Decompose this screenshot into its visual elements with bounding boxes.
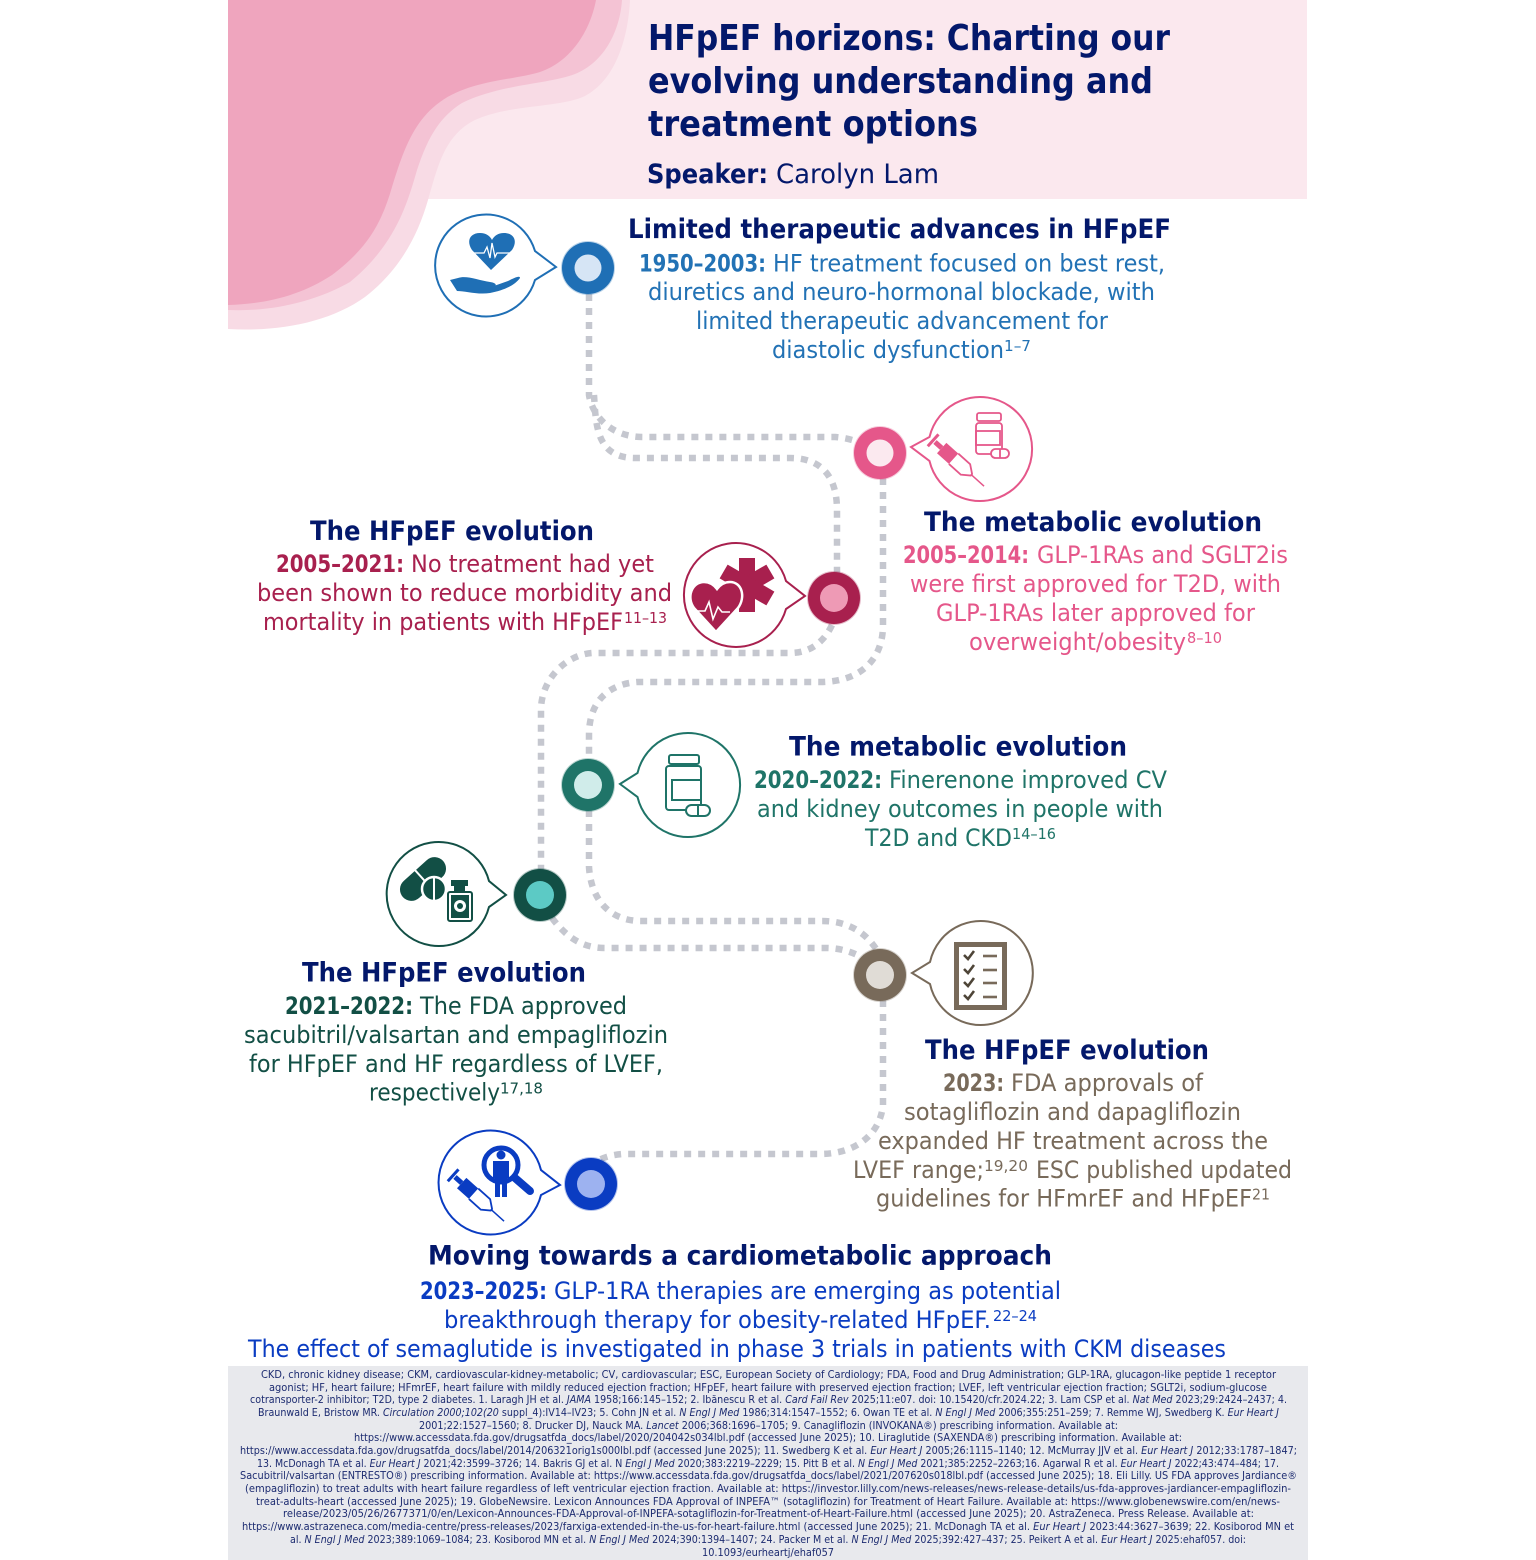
body text: 2020–2022: <box>754 766 882 794</box>
heading: Moving towards a cardiometabolic approach <box>428 1240 1052 1272</box>
body text: respectively <box>369 1078 500 1106</box>
speaker <box>647 159 939 190</box>
icon: heart in hand speech bubble <box>435 215 556 317</box>
node 4 <box>561 758 615 812</box>
body text: 2005–2014: <box>903 541 1029 569</box>
block: metabolic evolution 2005-2014 <box>903 507 1288 656</box>
body text <box>639 250 1165 364</box>
node 3 <box>807 571 861 625</box>
heading: The HFpEF evolution <box>925 1035 1209 1066</box>
icon: checklist speech bubble <box>912 921 1033 1025</box>
body text: for HFpEF and HF regardless of LVEF, <box>249 1050 663 1078</box>
footer: abbreviations and references: Sacubitril/valsartan (ENTRESTO®) prescribing information. Available at: https://www.accessdata.fda.gov/drugsatfda_docs/label/2021/207620s018lbl.pdf (accessed June 2025); 18. Eli Lilly. US FDA approves Jardiance® <box>240 1470 1297 1482</box>
node 7 <box>564 1157 618 1211</box>
speaker: Carolyn Lam <box>776 159 939 190</box>
block: moving towards a cardiometabolic approach <box>247 1240 1226 1363</box>
title: HFpEF horizons: Charting our <box>648 18 1170 59</box>
block: metabolic evolution 2020-2022 <box>754 732 1168 852</box>
body text: GLP-1RAs and SGLT2is <box>1037 541 1288 569</box>
body text: 2005–2021: <box>276 550 404 578</box>
body text: FDA approvals of <box>1011 1069 1204 1097</box>
footer: abbreviations and references: treat-adults-heart (accessed June 2025); 19. GlobeNewsire. Lexicon Announces FDA Approval of INPEFA™ (sotagliflozin) for Treatment of Heart Failure. Available at: https://www.globenewswire.com/en/news- <box>256 1496 1280 1508</box>
footer: abbreviations and references <box>228 1366 1308 1560</box>
footer: abbreviations and references: 2001;22:1527–1560; 8. Drucker DJ, Nauck MA. Lancet 2006;368:1696–1705; 9. Canagliflozin (INVOKANA®) prescribing information. Available at: <box>419 1420 1118 1432</box>
body text: The effect of semaglutide is investigated in phase 3 trials in patients with CKM diseases <box>247 1335 1226 1363</box>
footer: abbreviations and references: cotransporter-2 inhibitor; T2D, type 2 diabetes. 1. Laragh JH et al. JAMA 1958;166:145–152; 2. Ibănescu R et al. Card Fail Rev 2025;11:e07. doi: 10.15420/cfr.2024.22; 3. Lam CSP et al. Nat Med 2023;29:2424–2437; 4. <box>250 1394 1287 1406</box>
body text: GLP-1RA therapies are emerging as potential <box>554 1277 1061 1305</box>
body text: 22–24 <box>993 1307 1037 1325</box>
footer: abbreviations and references: 10.1093/eurheartj/ehaf057 <box>702 1547 834 1559</box>
body text: diuretics and neuro-hormonal blockade, with <box>648 278 1155 306</box>
body text: The FDA approved <box>419 992 627 1020</box>
body text: 8–10 <box>1187 629 1222 647</box>
body text: Finerenone improved CV <box>889 766 1168 794</box>
decorative wave: light <box>228 0 630 330</box>
body text: GLP-1RAs later approved for <box>936 599 1255 627</box>
footer: abbreviations and references: CKD, chronic kidney disease; CKM, cardiovascular-kidney-metabolic; CV, cardiovascular; ESC, European Society of Cardiology; FDA, Food and Drug Administration; GLP-1RA, glucagon-like peptide 1 receptor <box>261 1369 1277 1381</box>
icon: pills and bottle speech bubble <box>387 842 506 946</box>
speaker: Speaker: <box>647 159 768 190</box>
heading: The HFpEF evolution <box>310 516 594 547</box>
body text: 2021–2022: <box>285 992 413 1020</box>
body text: 19,20 <box>984 1157 1028 1175</box>
body text <box>853 1069 1292 1212</box>
body text: 1–7 <box>1004 337 1031 355</box>
body text: 17,18 <box>500 1080 543 1098</box>
body text: 2023: <box>943 1069 1004 1097</box>
body text <box>247 1277 1226 1363</box>
heading: The metabolic evolution <box>789 732 1127 762</box>
body text: 2023–2025: <box>420 1277 547 1305</box>
footer: abbreviations and references: https://www.accessdata.fda.gov/drugsatfda_docs/label/2020/204042s034lbl.pdf (accessed June 2025); 10. Liraglutide (SAXENDA®) prescribing information. Available at: <box>354 1432 1182 1444</box>
body text: were first approved for T2D, with <box>910 570 1281 598</box>
heading: Limited therapeutic advances in HFpEF <box>628 214 1171 245</box>
body text: diastolic dysfunction <box>772 336 1004 364</box>
node 2 <box>853 426 907 480</box>
node 5 <box>513 868 567 922</box>
title <box>648 18 1170 145</box>
icon: teal bottle speech bubble <box>620 733 740 837</box>
header band <box>228 0 1307 199</box>
decorative wave: dark <box>228 0 596 305</box>
block: HFpEF evolution 2023 <box>853 1035 1292 1212</box>
block: limited therapeutic advances <box>628 214 1171 364</box>
body text: 11–13 <box>624 609 667 627</box>
body text: sotagliflozin and dapagliflozin <box>904 1098 1241 1126</box>
body text: No treatment had yet <box>411 550 654 578</box>
body text: HF treatment focused on best rest, <box>773 250 1165 278</box>
body text: 1950–2003: <box>639 250 766 278</box>
footer: abbreviations and references: release/2023/05/26/2677371/0/en/Lexicon-Announces-FDA-Approval-of-INPEFA-sotagliflozin-for-Treatment-of-Heart-Failure.html (accessed June 2025); 20. AstraZeneca. Press Release. Available at: <box>283 1508 1254 1520</box>
body text <box>903 541 1288 656</box>
title: treatment options <box>648 104 978 145</box>
footer: abbreviations and references: https://www.accessdata.fda.gov/drugsatfda_docs/label/2014/206321orig1s000lbl.pdf (accessed June 2025); 11. Swedberg K et al. Eur Heart J 2005;26:1115–1140; 12. McMurray JJV et al. Eur Heart J 2012;33:1787–1847; <box>240 1445 1297 1457</box>
body text: 21 <box>1252 1186 1270 1204</box>
body text: 14–16 <box>1012 825 1056 843</box>
block: HFpEF evolution 2005-2021 <box>257 516 672 636</box>
body text <box>257 550 672 636</box>
timeline dotted paths <box>541 294 883 1165</box>
body text <box>754 766 1168 852</box>
footer: abbreviations and references: agonist; HF, heart failure; HFmrEF, heart failure with mildly reduced ejection fraction; HFpEF, heart failure with preserved ejection fraction; LVEF, left ventricular ejection fraction; SGLT2i, sodium-glucose <box>269 1382 1267 1394</box>
body text: been shown to reduce morbidity and <box>257 579 672 607</box>
footer: abbreviations and references: (empagliflozin) to treat adults with heart failure regardless of left ventricular ejection fraction. Available at: https://investor.lilly.com/news-releases/news-release-details/us-fda-approves-jardiancer-empagliflozin- <box>245 1483 1291 1495</box>
body text: and kidney outcomes in people with <box>757 795 1163 823</box>
body text <box>244 992 668 1106</box>
footer: abbreviations and references: al. N Engl J Med 2023;389:1069–1084; 23. Kosiborod MN et al. N Engl J Med 2024;390:1394–1407; 24. Packer M et al. N Engl J Med 2025;392:427–437; 25. Peikert A et al. Eur Heart J 2025:ehaf057. doi: <box>290 1534 1246 1546</box>
footer: abbreviations and references: https://www.astrazeneca.com/media-centre/press-releases/2023/farxiga-extended-in-the-us-for-heart-failure.html (accessed June 2025); 21. McDonagh TA et al. Eur Heart J 2023:44:3627–3639; 22. Kosiborod MN et <box>242 1521 1294 1533</box>
body text: LVEF range; <box>853 1156 984 1184</box>
heading: The metabolic evolution <box>924 507 1262 538</box>
body text: guidelines for HFmrEF and HFpEF <box>876 1184 1252 1212</box>
body text: limited therapeutic advancement for <box>696 307 1108 335</box>
body text: breakthrough therapy for obesity-related HFpEF. <box>444 1306 991 1334</box>
body text: mortality in patients with HFpEF <box>263 608 623 636</box>
body text: sacubitril/valsartan and empagliflozin <box>244 1021 668 1049</box>
icon: heart and star of life speech bubble <box>684 543 805 647</box>
heading: The HFpEF evolution <box>302 958 586 988</box>
node 6 <box>853 948 907 1002</box>
footer: abbreviations and references: Braunwald E, Bristow MR. Circulation 2000;102(20 suppl_4):IV14–IV23; 5. Cohn JN et al. N Engl J Med 1986;314:1547–1552; 6. Owan TE et al. N Engl J Med 2006;355:251–259; 7. Remme WJ, Swedberg K. Eur Heart J <box>258 1407 1279 1419</box>
decorative wave: medium <box>228 0 622 310</box>
block: HFpEF evolution 2021-2022 <box>244 958 668 1106</box>
title: evolving understanding and <box>648 61 1153 102</box>
node 1 <box>561 241 615 295</box>
body text: overweight/obesity <box>969 628 1186 656</box>
footer: abbreviations and references: 13. McDonagh TA et al. Eur Heart J 2021;42:3599–3726; 14. Bakris GJ et al. N Engl J Med 2020;383:2219–2229; 15. Pitt B et al. N Engl J Med 2021;385:2252–2263;16. Agarwal R et al. Eur Heart J 2022;43:474–484; 17. <box>257 1458 1279 1470</box>
icon: magnifier person and syringe speech bubble <box>439 1130 560 1234</box>
body text: T2D and CKD <box>864 824 1012 852</box>
body text: expanded HF treatment across the <box>878 1127 1268 1155</box>
body text: ESC published updated <box>1036 1156 1292 1184</box>
icon: bottle and syringe speech bubble <box>911 397 1032 501</box>
